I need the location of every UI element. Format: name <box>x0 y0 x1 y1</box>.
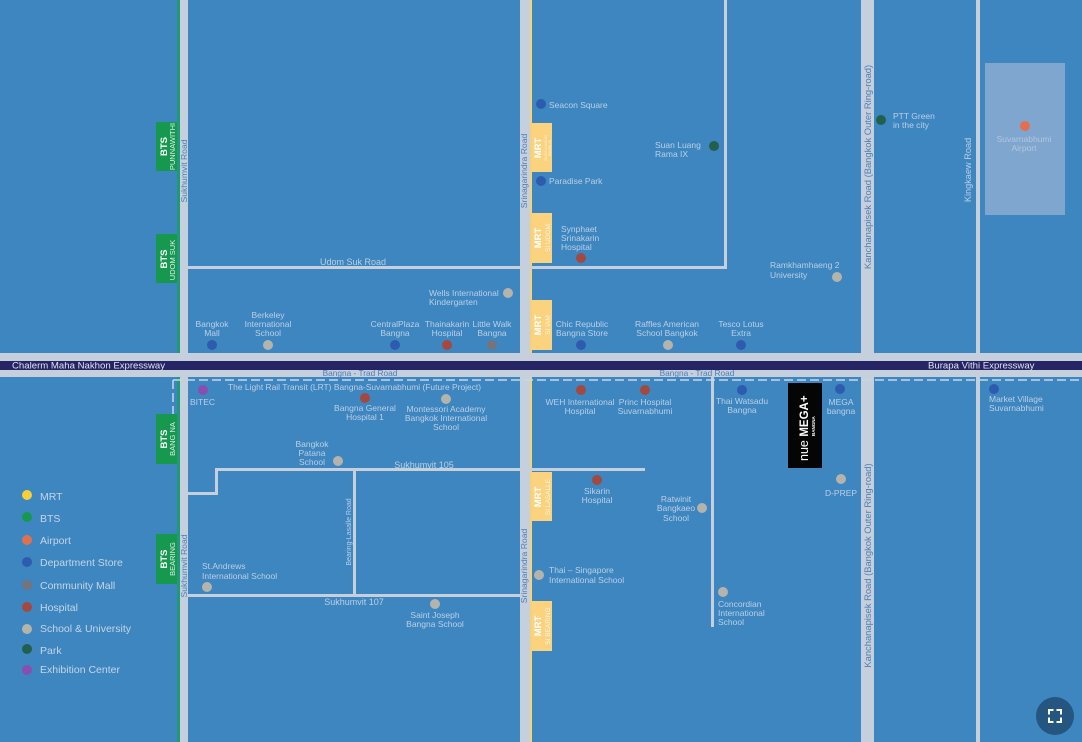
location map: School <box>663 513 689 523</box>
place labels: Wells International <box>429 288 499 298</box>
location map: Bangna <box>727 405 757 415</box>
Bangna Trad labels: Bangna - Trad Road <box>660 368 735 378</box>
rotated road labels: Kingkaew Road <box>963 138 973 202</box>
BTS stations: BTS <box>159 250 170 268</box>
MRT line <box>530 0 532 742</box>
place labels: Srinakarin <box>561 233 600 243</box>
location map: Hospital <box>565 406 595 416</box>
location map: CentralPlaza <box>371 319 420 329</box>
MRT stations: SI LASALLE <box>545 478 552 515</box>
MRT stations: SI BEARING <box>545 607 552 645</box>
place labels: International <box>718 608 765 618</box>
location map: Patana <box>299 448 326 458</box>
location map: Saint Joseph <box>410 610 460 620</box>
MRT stations: SI IAM <box>545 315 552 335</box>
project marker: NUE MEGA+: nue MEGA+ <box>797 395 811 461</box>
MRT stations: MRT <box>533 138 544 158</box>
BTS stations <box>156 122 177 584</box>
location map: MEGA <box>828 397 854 407</box>
rotated road labels: Sukhumvit Road <box>179 139 189 203</box>
location map: Suvarnabhumi <box>997 134 1052 144</box>
location map: Airport <box>1011 143 1037 153</box>
legend: Department Store <box>40 557 123 569</box>
BTS stations: UDOM SUK <box>168 240 177 280</box>
place labels: Thai – Singapore <box>549 565 614 575</box>
legend: MRT <box>40 491 63 503</box>
MRT stations: MRT <box>533 315 544 335</box>
place labels: International School <box>549 575 624 585</box>
place labels <box>190 100 1044 627</box>
location map: Thainakarin <box>425 319 469 329</box>
location map: Princ Hospital <box>619 397 671 407</box>
location map: Hospital 1 <box>346 412 384 422</box>
LRT dashed line <box>173 380 1082 416</box>
location map: School <box>433 422 459 432</box>
legend: School & University <box>40 623 132 635</box>
location map: Bangna School <box>406 619 464 629</box>
MRT stations: SI UDOM <box>545 224 552 252</box>
place labels: Seacon Square <box>549 100 608 110</box>
place labels: Paradise Park <box>549 176 603 186</box>
project marker: NUE MEGA+: BANGNA <box>811 416 816 436</box>
location map: Bangna General <box>334 403 396 413</box>
location map: Tesco Lotus <box>718 319 764 329</box>
location map: International <box>245 319 291 329</box>
icon: fullscreen button <box>1036 697 1074 735</box>
legend: Park <box>40 645 62 657</box>
location map: Bangkok International <box>405 413 487 423</box>
place labels: International School <box>202 571 277 581</box>
legend: Airport <box>40 535 71 547</box>
rotated road labels: Kanchanapisek Road (Bangkok Outer Ring-road) <box>862 463 873 668</box>
location map: Chic Republic <box>556 319 609 329</box>
location map: Berkeley <box>251 310 285 320</box>
location map: WEH International <box>546 397 615 407</box>
location map: Bangkok <box>295 439 329 449</box>
map points <box>198 99 1030 609</box>
legend: Community Mall <box>40 580 115 592</box>
rotated road labels: Sukhumvit Road <box>179 534 189 598</box>
place labels: Kindergarten <box>429 297 478 307</box>
place labels: Suvarnabhumi <box>989 403 1044 413</box>
place labels: Hospital <box>561 242 592 252</box>
rotated road labels <box>179 65 973 668</box>
location map: Little Walk <box>473 319 512 329</box>
location map: School <box>299 457 325 467</box>
BTS line <box>177 0 180 742</box>
location map: Bangna Store <box>556 328 608 338</box>
place labels: in the city <box>893 120 930 130</box>
location map: Bangna <box>477 328 507 338</box>
MRT stations: SUAN LUANG <box>543 135 548 161</box>
legend <box>22 490 132 676</box>
location map: Suvarnabhumi <box>618 406 673 416</box>
BTS stations: BTS <box>159 137 170 156</box>
place labels: Rama IX <box>655 149 688 159</box>
BTS stations: PUNNAWITHI <box>168 123 177 170</box>
place labels: PTT Green <box>893 111 935 121</box>
place labels: Concordian <box>718 599 762 609</box>
location map: School Bangkok <box>636 328 698 338</box>
legend: Exhibition Center <box>40 664 120 676</box>
Bangna Trad labels: Bangna - Trad Road <box>323 368 398 378</box>
MRT stations <box>532 123 552 651</box>
rotated road labels: Kanchanapisek Road (Bangkok Outer Ring-road) <box>862 65 873 269</box>
project marker: NUE MEGA+ <box>788 383 822 468</box>
legend: Hospital <box>40 602 78 614</box>
expressway names: Burapa Vithi Expressway <box>928 361 1035 372</box>
BTS stations: BTS <box>159 430 170 448</box>
legend: BTS <box>40 513 60 525</box>
BTS stations: BEARING <box>168 542 177 576</box>
rotated road labels: Srinagarindra Road <box>519 529 529 603</box>
road labels: Sukhumvit 105 <box>394 460 454 470</box>
location map: D-PREP <box>825 488 857 498</box>
location map: Hospital <box>432 328 462 338</box>
road labels <box>320 257 454 607</box>
MRT stations: RAMA IX <box>547 140 552 156</box>
location map: Thai Watsadu <box>716 396 768 406</box>
location map: Ratwinit <box>661 494 692 504</box>
place labels: Ramkhamhaeng 2 <box>770 260 840 270</box>
place labels: School <box>718 617 744 627</box>
road labels: Udom Suk Road <box>320 257 386 267</box>
BTS stations: BTS <box>159 550 170 568</box>
location map: Bangkaeo <box>657 503 695 513</box>
MRT stations: MRT <box>533 616 544 636</box>
location map: School <box>255 328 281 338</box>
expressway names: Chalerm Maha Nakhon Expressway <box>12 361 165 372</box>
LRT label: The Light Rail Transit (LRT) Bangna-Suvarnabhumi (Future Project) <box>228 382 481 392</box>
location map: Montessori Academy <box>407 404 486 414</box>
place labels: University <box>770 270 808 280</box>
MRT stations: MRT <box>533 228 544 248</box>
airport area <box>985 63 1065 215</box>
place labels: St.Andrews <box>202 561 245 571</box>
location map: Extra <box>731 328 751 338</box>
place labels: Suan Luang <box>655 140 701 150</box>
MRT stations: MRT <box>533 487 544 507</box>
location map: Mall <box>204 328 220 338</box>
location map: Bangkok <box>195 319 229 329</box>
expressway band <box>0 361 1082 370</box>
location map: bangna <box>827 406 855 416</box>
place labels: BITEC <box>190 397 215 407</box>
location map: Bangna <box>380 328 410 338</box>
location map: Hospital <box>582 495 612 505</box>
Bangna Trad labels <box>323 368 735 378</box>
place labels: Market Village <box>989 394 1043 404</box>
rotated road labels: Srinagarindra Road <box>519 134 529 208</box>
place labels: Synphaet <box>561 224 598 234</box>
rotated road labels: Bearing-Lasalle Road <box>346 498 353 566</box>
location map: Sikarin <box>584 486 610 496</box>
location map: Raffles American <box>635 319 699 329</box>
road labels: Sukhumvit 107 <box>324 597 384 607</box>
expressway names <box>12 361 1035 372</box>
BTS stations: BANG NA <box>168 422 177 456</box>
